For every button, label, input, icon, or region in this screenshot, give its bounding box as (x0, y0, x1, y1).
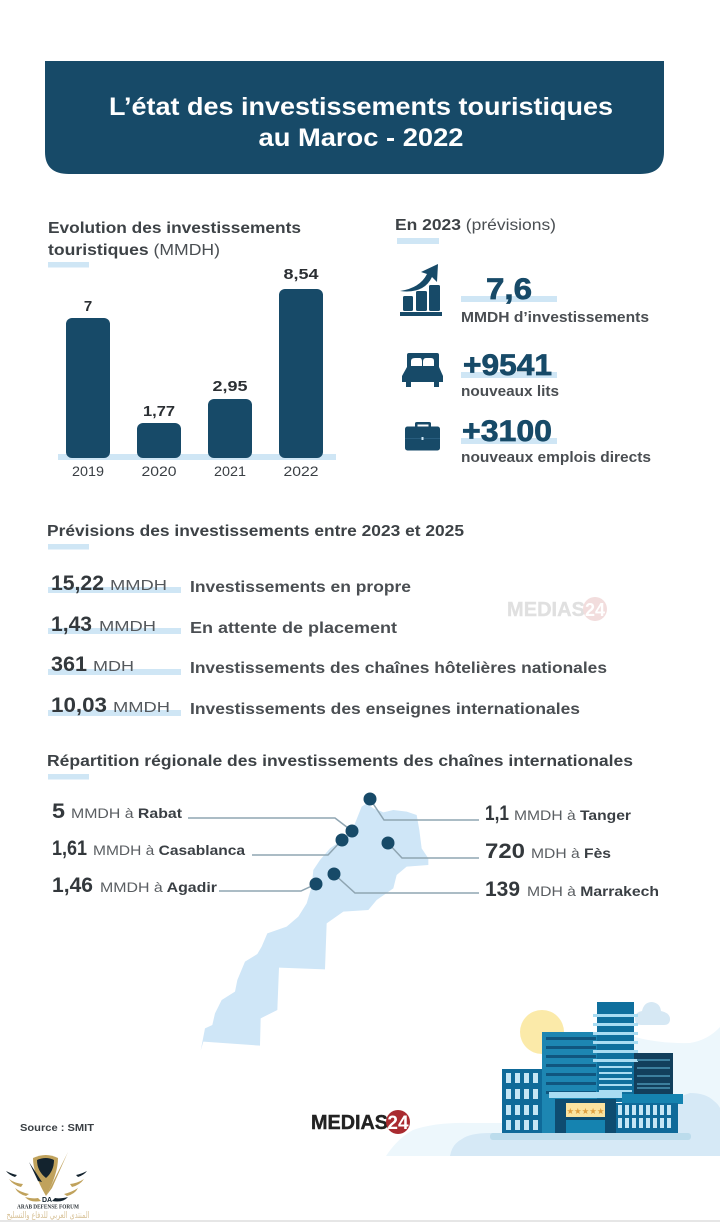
map: Morocco (201, 803, 428, 1051)
logo: arab defense forum: DA (42, 1197, 52, 1204)
label: Marrakech (485, 878, 659, 901)
heading: repartition regionale: Répartition régionale des investissements des chaînes internationales (47, 753, 633, 770)
watermark: medias24: MEDIAS (507, 599, 585, 621)
label: Tanger: 1,1 (485, 802, 509, 825)
label: Casablanca: 1,61 (52, 837, 87, 860)
row: en attente de placement (48, 613, 397, 637)
heading: evolution (48, 220, 301, 268)
label: Agadir: 1,46 (52, 874, 93, 897)
stat: +9541 lits: +9541 (463, 349, 552, 382)
title banner: L’état des investissements touristiques (109, 93, 613, 121)
stat: +3100 emplois (461, 415, 651, 466)
label: Fes (485, 840, 611, 863)
bar chart: evolution 2019-2022: 2,95 (212, 378, 248, 395)
stat: +3100 emplois: nouveaux emplois directs (461, 450, 651, 466)
icon: briefcase (405, 422, 440, 450)
logo: medias24: 24 (387, 1113, 409, 1134)
row: chaines nationales: Investissements des chaînes hôtelières nationales (190, 660, 607, 677)
row: investissements en propre: 15,22 (51, 572, 104, 595)
label: Agadir (52, 874, 218, 897)
stat: 7,6 MMDH: MMDH d’investissements (461, 310, 649, 326)
row: enseignes internationales (48, 694, 580, 718)
label: Fes: MDH à Fès (531, 845, 611, 861)
bar chart: evolution 2019-2022: 2022 (284, 463, 319, 479)
heading: previsions: Prévisions des investissements entre 2023 et 2025 (47, 523, 464, 540)
bar chart: evolution 2019-2022: 1,77 (143, 403, 175, 420)
logo: medias24: MEDIAS (311, 1112, 388, 1134)
row: investissements en propre: Investissements en propre (190, 579, 411, 596)
stat: +3100 emplois: +3100 (462, 415, 552, 448)
label: Fes: 720 (485, 840, 525, 863)
row: chaines nationales (48, 653, 607, 677)
label: Marrakech: MDH à Marrakech (527, 883, 659, 899)
illustration: hotel skyline: ★★★★★ (566, 1106, 605, 1116)
row: en attente de placement: MMDH (99, 618, 156, 635)
bar chart: evolution 2019-2022: 2021 (214, 463, 246, 479)
row: chaines nationales: 361 (51, 653, 87, 676)
title banner: au Maroc - 2022 (258, 124, 464, 152)
label: Casablanca (52, 837, 245, 860)
stat: +9541 lits: nouveaux lits (461, 384, 559, 400)
label: Tanger (485, 802, 632, 825)
stat: +9541 lits (461, 349, 559, 400)
watermark: medias24: 24 (585, 600, 605, 620)
label: Agadir: MMDH à Agadir (100, 879, 218, 895)
heading: previsions (47, 523, 464, 550)
row: enseignes internationales: MMDH (113, 699, 170, 716)
row: enseignes internationales: 10,03 (51, 694, 107, 717)
label: Rabat (52, 800, 182, 823)
logo: arab defense forum: المنتدى العربي للدفاع والتسليح (6, 1211, 90, 1221)
bar chart: evolution 2019-2022: 2019 (72, 463, 104, 479)
row: investissements en propre: MMDH (110, 577, 167, 594)
stat: 7,6 MMDH: 7,6 (486, 273, 532, 306)
logo: arab defense forum: ARAB DEFENSE FORUM (17, 1204, 79, 1210)
icon: rising bar chart (400, 264, 442, 316)
illustration: hotel skyline (386, 1002, 720, 1156)
map connectors (188, 799, 479, 893)
heading: evolution: touristiques (MMDH) (48, 242, 220, 259)
row: chaines nationales: MDH (93, 658, 134, 675)
bar chart: evolution 2019-2022: 7 (84, 298, 92, 315)
map dots (310, 792, 394, 890)
stat: 7,6 MMDH (461, 273, 649, 326)
label: Casablanca: MMDH à Casablanca (93, 842, 245, 858)
heading: en 2023 (395, 217, 556, 244)
bar chart: evolution 2019-2022: 8,54 (284, 266, 319, 283)
row: enseignes internationales: Investissements des enseignes internationales (190, 701, 580, 718)
icon: bed (402, 353, 443, 387)
row: investissements en propre (48, 572, 411, 596)
bar chart: evolution 2019-2022: 2020 (142, 463, 177, 479)
bar chart: evolution 2019-2022 (58, 266, 336, 479)
heading: evolution: Evolution des investissements (48, 220, 301, 237)
row: en attente de placement: En attente de placement (190, 620, 397, 637)
row: en attente de placement: 1,43 (51, 613, 92, 636)
source: Source : SMIT (20, 1122, 95, 1134)
heading: repartition regionale (47, 753, 633, 780)
logo: arab defense forum (6, 1152, 90, 1221)
label: Tanger: MMDH à Tanger (514, 807, 632, 823)
heading: en 2023: En 2023 (prévisions) (395, 217, 556, 234)
label: Rabat: 5 (52, 800, 65, 823)
title banner (45, 61, 664, 174)
label: Marrakech: 139 (485, 878, 520, 901)
label: Rabat: MMDH à Rabat (71, 805, 182, 821)
